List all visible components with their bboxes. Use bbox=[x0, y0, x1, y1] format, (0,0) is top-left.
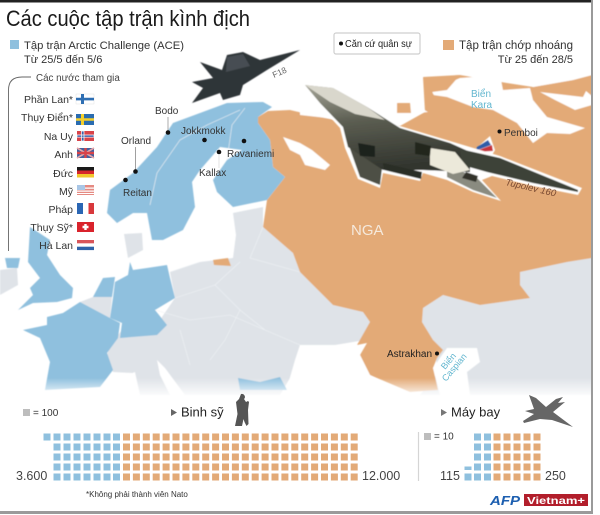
left wing bbox=[348, 143, 383, 185]
base: Astrakhan: Astrakhan bbox=[387, 349, 432, 360]
base: Pemboi: Pemboi bbox=[504, 128, 538, 139]
country: France: Pháp bbox=[48, 204, 73, 216]
base: Bodo bbox=[155, 106, 179, 135]
country: Switzerland: Thụy Sỹ* bbox=[30, 222, 73, 234]
legend: Russian snap exercise bbox=[443, 40, 573, 66]
country: Sweden bbox=[21, 112, 94, 125]
icon: Tupolev 160 bomber bbox=[303, 83, 582, 201]
right wing bbox=[460, 149, 578, 192]
map: blue France bbox=[23, 302, 120, 390]
label: Kara Sea bbox=[471, 88, 493, 111]
map: blue Netherlands bbox=[93, 277, 115, 297]
logo: Vietnam+: Vietnam+ bbox=[527, 495, 585, 507]
value: 3.600: 3.600 bbox=[16, 469, 47, 483]
country: Germany: Đức bbox=[53, 168, 73, 180]
right border bbox=[591, 0, 593, 512]
orange squares: 12,000 troops bbox=[123, 434, 358, 480]
fuselage bbox=[305, 85, 470, 172]
label: Kara Sea: Biển bbox=[471, 88, 491, 100]
blue squares: 115 aircraft bbox=[464, 434, 491, 480]
legend: Russian snap exercise: Tập trận chớp nhoáng bbox=[459, 40, 573, 52]
legend: Arctic Challenge: Tập trận Arctic Challenge (ACE) bbox=[24, 40, 184, 52]
country: Norway: Na Uy bbox=[44, 131, 74, 143]
upper fuselage bbox=[305, 85, 385, 120]
tail fin with Russian flag bbox=[472, 136, 495, 162]
scale key: 10: = 10 bbox=[434, 432, 454, 442]
heading: soldiers: Binh sỹ bbox=[181, 404, 224, 420]
map: white Caspian Sea and Black Sea bbox=[122, 345, 480, 395]
map: orange Crimea and Kaliningrad bbox=[213, 258, 343, 373]
troops chart bbox=[16, 394, 400, 483]
base: Bodo: Bodo bbox=[155, 106, 179, 117]
base: Jokkmokk: Jokkmokk bbox=[181, 126, 226, 137]
lower tail plane bbox=[447, 165, 497, 198]
base: Rovaniemi bbox=[227, 139, 274, 160]
base: Orland bbox=[121, 136, 151, 174]
label: Tupolev 160: Tupolev 160 bbox=[504, 177, 558, 200]
scale key: 10 bbox=[424, 432, 454, 442]
base: Reitan bbox=[123, 178, 152, 199]
aircraft chart bbox=[424, 395, 573, 483]
icon: F18 fighter jet bbox=[192, 50, 300, 103]
base: Kallax bbox=[199, 150, 226, 179]
footnote: *Không phải thành viên Nato bbox=[86, 490, 188, 499]
base: Kallax: Kallax bbox=[199, 168, 226, 179]
legend: Arctic Challenge bbox=[10, 40, 184, 66]
map: orange land fringe on Barents bbox=[397, 75, 460, 113]
label: Caspian Sea: Caspian bbox=[440, 352, 469, 383]
country: Switzerland bbox=[30, 222, 94, 234]
country: France bbox=[48, 203, 94, 216]
heading: aircraft: Máy bay bbox=[451, 404, 501, 420]
icon: soldier bbox=[235, 394, 249, 426]
scale key: 100: = 100 bbox=[33, 408, 59, 419]
map: blue Scandinavia and Finland bbox=[107, 102, 285, 240]
orange squares: 250 aircraft bbox=[494, 434, 540, 480]
legend: Arctic Challenge: Từ 25/5 đến 5/6 bbox=[24, 54, 102, 66]
map: grey neutral Europe bbox=[107, 207, 370, 395]
logo: AFP: AFP bbox=[489, 494, 521, 508]
country: Germany bbox=[53, 167, 94, 180]
country: United Kingdom: Anh bbox=[54, 149, 73, 161]
map bottom fade bbox=[0, 378, 592, 398]
legend: military base box: Căn cứ quân sự bbox=[345, 38, 412, 50]
map: grey Ireland, Denmark and Belgium bbox=[0, 233, 143, 318]
map: blue Germany bbox=[110, 262, 175, 338]
blue squares: 3,600 troops bbox=[44, 434, 120, 480]
map: blue United Kingdom bbox=[5, 227, 73, 310]
icon: fighter jet bbox=[523, 395, 573, 427]
engine pods bbox=[358, 143, 375, 157]
base: Reitan: Reitan bbox=[123, 188, 152, 199]
country: Sweden: Thụy Điển* bbox=[21, 112, 73, 124]
legend: military base box bbox=[334, 33, 420, 54]
white outline glow bbox=[303, 83, 582, 201]
bracket line bbox=[8, 77, 31, 251]
divider bbox=[418, 432, 420, 481]
country: Norway bbox=[44, 131, 94, 143]
map: orange Russia bbox=[258, 75, 592, 392]
country: United Kingdom bbox=[54, 148, 94, 161]
value: 12.000: 12.000 bbox=[362, 469, 400, 483]
label: F18: F18 bbox=[271, 65, 288, 80]
legend: Russian snap exercise: Từ 25 đến 28/5 bbox=[498, 54, 573, 66]
map: blue southern strip bbox=[238, 377, 287, 390]
country: Netherlands: Hà Lan bbox=[39, 240, 73, 252]
value: 115: 115 bbox=[440, 469, 460, 483]
base: Jokkmokk bbox=[181, 126, 226, 142]
logo: Vietnam+ bbox=[524, 494, 588, 507]
map: grey Kazakhstan and Central Asia bbox=[420, 258, 592, 395]
participating countries panel bbox=[8, 73, 120, 252]
base: Orland: Orland bbox=[121, 136, 151, 147]
map: white Arctic seas bbox=[283, 0, 592, 170]
top border bbox=[0, 0, 592, 2]
label: Caspian Sea: Biển bbox=[439, 351, 458, 371]
country: Netherlands bbox=[39, 240, 94, 252]
bottom border bbox=[0, 511, 593, 514]
heading: participating countries: Các nước tham gia bbox=[36, 73, 120, 84]
country: Finland: Phần Lan* bbox=[24, 94, 73, 106]
map of Europe and Russia bbox=[0, 0, 592, 395]
value: 250: 250 bbox=[545, 469, 566, 483]
map: country borders bbox=[150, 108, 300, 365]
base: Rovaniemi: Rovaniemi bbox=[227, 149, 274, 160]
label: NGA: NGA bbox=[351, 222, 384, 239]
label: Kara Sea: Kara bbox=[471, 100, 493, 111]
title: Các cuộc tập trận kình địch bbox=[6, 6, 250, 31]
country: USA: Mỹ bbox=[59, 186, 74, 198]
country: USA bbox=[59, 185, 94, 198]
